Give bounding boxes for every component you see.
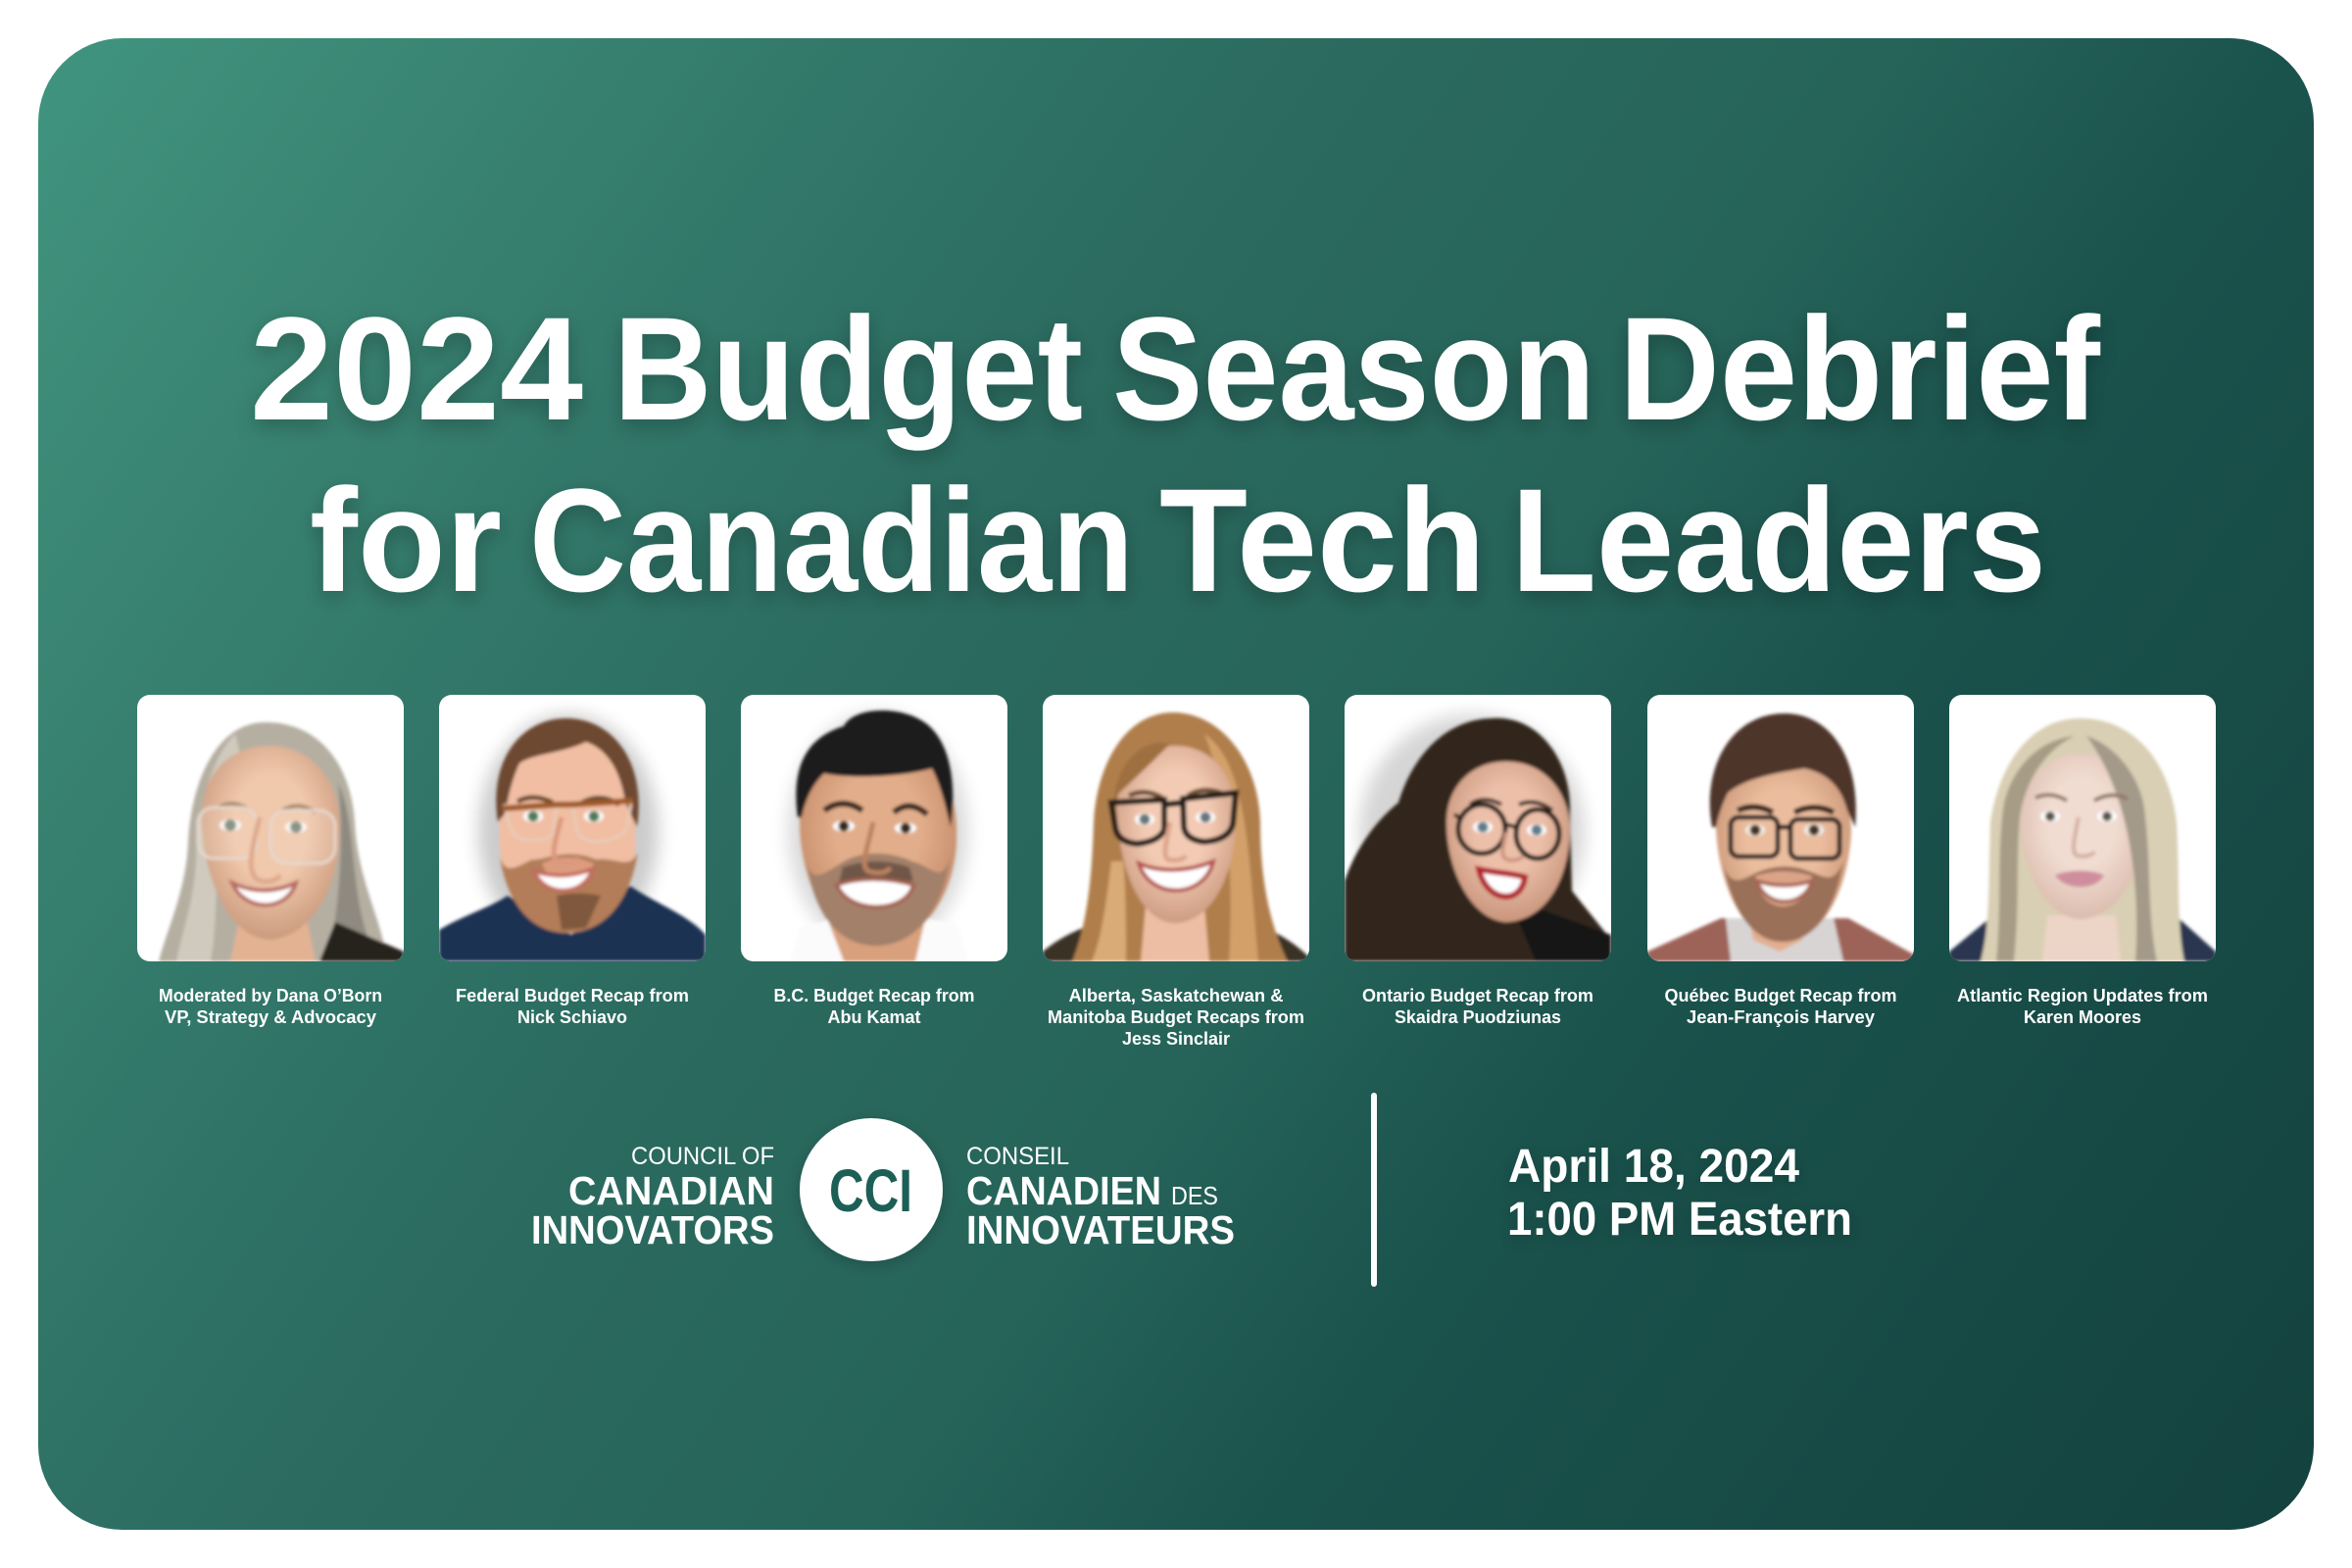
logo text: French wordmark: CANADIEN bbox=[966, 1168, 1161, 1213]
logo text: French wordmark bbox=[966, 1143, 1235, 1252]
caption: Karen Moores: Karen Moores bbox=[2024, 1007, 2141, 1027]
caption: Abu Kamat: Abu Kamat bbox=[827, 1007, 921, 1027]
caption: Karen Moores bbox=[1957, 986, 2208, 1027]
caption: Abu Kamat: B.C. Budget Recap from bbox=[774, 986, 974, 1005]
title: Budget bbox=[613, 286, 1083, 451]
caption: Karen Moores: Atlantic Region Updates from bbox=[1957, 986, 2208, 1005]
caption: Skaidra Puodziunas bbox=[1362, 986, 1593, 1027]
caption: Dana O'Born bbox=[159, 986, 382, 1027]
portrait: Karen Moores bbox=[1949, 695, 2216, 961]
portrait: Jess Sinclair bbox=[1043, 695, 1309, 961]
title bbox=[250, 286, 2101, 622]
logo text: English wordmark: INNOVATORS bbox=[531, 1207, 774, 1252]
logo text: English wordmark: CANADIAN bbox=[568, 1168, 774, 1213]
logo: Council of Canadian Innovators bbox=[531, 1118, 1235, 1261]
logo text: French wordmark: DES bbox=[1171, 1181, 1218, 1210]
logo text: French wordmark: CONSEIL bbox=[966, 1143, 1069, 1170]
caption: Nick Schiavo: Federal Budget Recap from bbox=[456, 986, 689, 1005]
portrait: Abu Kamat bbox=[741, 695, 1007, 961]
portrait: Nick Schiavo bbox=[439, 695, 706, 961]
event date and time: 1:00 PM Eastern bbox=[1507, 1194, 1852, 1246]
caption: Jean-François Harvey bbox=[1664, 986, 1897, 1027]
divider bbox=[1371, 1093, 1377, 1287]
caption: Nick Schiavo: Nick Schiavo bbox=[517, 1007, 627, 1027]
title: Debrief bbox=[1619, 286, 2101, 451]
portrait: Jean-François Harvey bbox=[1647, 695, 1914, 961]
caption: Skaidra Puodziunas: Skaidra Puodziunas bbox=[1395, 1007, 1561, 1027]
caption: Jess Sinclair: Jess Sinclair bbox=[1122, 1029, 1230, 1049]
logo text: French wordmark: INNOVATEURS bbox=[966, 1207, 1235, 1252]
portrait: Dana O'Born bbox=[137, 695, 404, 961]
title: for bbox=[310, 458, 502, 622]
logo text: English wordmark: COUNCIL OF bbox=[631, 1143, 774, 1170]
title: Season bbox=[1112, 286, 1595, 451]
caption: Dana O'Born: VP, Strategy & Advocacy bbox=[165, 1007, 376, 1027]
caption: Jess Sinclair: Alberta, Saskatchewan & bbox=[1068, 986, 1284, 1005]
caption: Jess Sinclair bbox=[1048, 986, 1304, 1049]
event date and time: April 18, 2024 bbox=[1508, 1141, 1799, 1193]
title: Leaders bbox=[1511, 458, 2046, 622]
caption: Jean-François Harvey: Jean-François Harvey bbox=[1687, 1007, 1875, 1027]
caption: Jean-François Harvey: Québec Budget Recap from bbox=[1664, 986, 1897, 1005]
logo text: English wordmark bbox=[531, 1143, 774, 1252]
event date and time bbox=[1507, 1141, 1852, 1246]
caption: Abu Kamat bbox=[774, 986, 974, 1027]
caption: Jess Sinclair: Manitoba Budget Recaps from bbox=[1048, 1007, 1304, 1027]
caption: Nick Schiavo bbox=[456, 986, 689, 1027]
caption: Dana O'Born: Moderated by Dana O’Born bbox=[159, 986, 382, 1005]
title: Tech bbox=[1159, 458, 1486, 622]
portrait: Skaidra Puodziunas bbox=[1345, 695, 1611, 961]
logo icon: CCI circle bbox=[800, 1118, 943, 1261]
logo icon: CCI circle: CCI bbox=[829, 1157, 912, 1224]
title: 2024 bbox=[250, 286, 583, 451]
caption: Skaidra Puodziunas: Ontario Budget Recap from bbox=[1362, 986, 1593, 1005]
title: Canadian bbox=[529, 458, 1134, 622]
